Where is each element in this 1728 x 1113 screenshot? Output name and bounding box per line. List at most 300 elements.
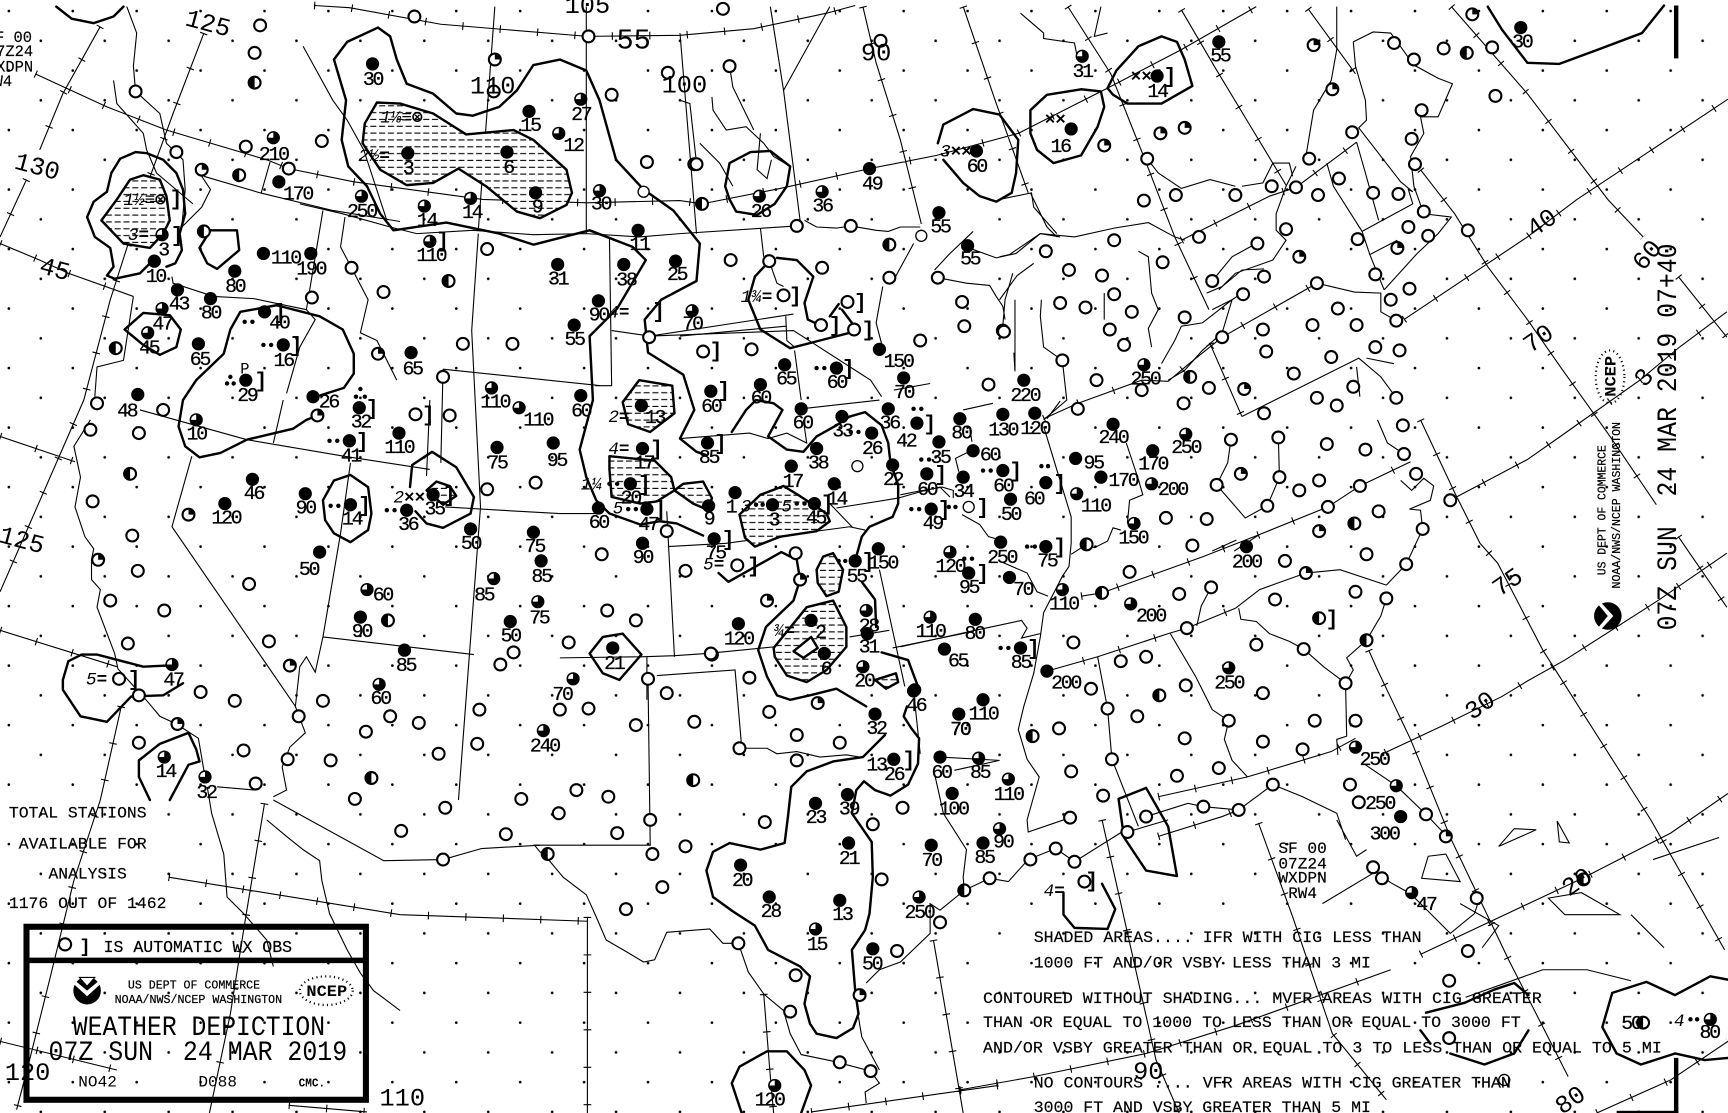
automatic observation brackets: ] xyxy=(1054,537,1066,560)
station ceiling values: 50 xyxy=(1621,1012,1642,1035)
station ceiling values: 95 xyxy=(547,449,568,472)
automatic observation brackets: ] xyxy=(1009,461,1022,484)
station ceiling values: 150 xyxy=(884,350,914,373)
station ceiling values: 75 xyxy=(525,535,546,558)
station ceiling values: 65 xyxy=(402,358,423,381)
shading legend text: THAN OR EQUAL TO 1000 TO LESS THAN OR EQUAL TO 3000 FT xyxy=(983,1014,1521,1032)
station ceiling values: 110 xyxy=(994,783,1024,806)
station ceiling values: 1 xyxy=(726,495,737,518)
station ceiling values: 30 xyxy=(591,192,612,215)
station ceiling values: 50 xyxy=(299,558,320,581)
station ceiling values: 210 xyxy=(259,143,289,166)
station ceiling values: 10 xyxy=(146,265,166,288)
visibility annotations: 3×× xyxy=(940,142,972,162)
station ceiling values: 41 xyxy=(341,445,361,468)
station ceiling values: 200 xyxy=(1051,672,1082,695)
station ceiling values: 110 xyxy=(968,703,999,726)
station ceiling values: 110 xyxy=(916,620,946,643)
map code xyxy=(1278,840,1327,903)
automatic observation brackets: ] xyxy=(710,341,722,364)
station ceiling values: 10 xyxy=(187,423,207,446)
station ceiling values: 36 xyxy=(880,412,900,435)
station ceiling values: 26 xyxy=(884,763,905,786)
station ceiling values: 13 xyxy=(866,753,887,776)
station ceiling values: 26 xyxy=(751,200,771,223)
station ceiling values: 50 xyxy=(1001,503,1022,526)
station ceiling values: 85 xyxy=(974,846,995,869)
station ceiling values: 85 xyxy=(970,761,991,784)
map code: 07Z24 xyxy=(1278,855,1327,873)
automatic observation brackets: ] xyxy=(290,336,302,359)
station ceiling values: 12 xyxy=(563,134,584,157)
automatic observation brackets: ] xyxy=(862,320,874,343)
station ceiling values: 46 xyxy=(906,694,927,717)
station ceiling values: 31 xyxy=(548,267,569,290)
station ceiling values: 60 xyxy=(793,412,813,435)
station ceiling values: 95 xyxy=(1084,451,1104,474)
station ceiling values: 100 xyxy=(939,797,969,820)
station ceiling values: 75 xyxy=(529,607,550,630)
station ceiling values: 70 xyxy=(1013,578,1034,601)
station ceiling values: 22 xyxy=(883,468,904,491)
station ceiling values: 28 xyxy=(761,900,781,923)
station ceiling values: 45 xyxy=(806,506,827,529)
station ceiling values: 35 xyxy=(425,498,445,521)
station ceiling values: 25 xyxy=(667,263,688,286)
station ceiling values: 6 xyxy=(503,156,514,179)
visibility annotations: 1¾= xyxy=(741,288,772,308)
station ceiling values: 250 xyxy=(1360,748,1390,771)
automatic observation brackets: ] xyxy=(722,529,734,552)
station ceiling values: 85 xyxy=(474,584,495,607)
present weather P marker: P xyxy=(240,361,250,379)
visibility annotations: 2= xyxy=(608,408,629,428)
automatic observation brackets: ] xyxy=(422,405,435,428)
station ceiling values: 200 xyxy=(1136,605,1166,628)
station ceiling values: 31 xyxy=(1072,60,1093,83)
automatic observation brackets: ] xyxy=(854,293,867,316)
station ceiling values: 70 xyxy=(922,849,942,872)
station ceiling values: 38 xyxy=(808,451,829,474)
grid labels: 30 xyxy=(1460,686,1501,727)
station ceiling values: 30 xyxy=(1512,30,1533,53)
title box: WEATHER DEPICTION xyxy=(73,1013,325,1044)
station ceiling values: 200 xyxy=(1232,551,1262,574)
station ceiling values: 65 xyxy=(776,368,797,391)
automatic observation brackets: ] xyxy=(170,189,182,212)
station ceiling values: 43 xyxy=(169,293,190,316)
station ceiling values: 60 xyxy=(917,478,938,501)
station ceiling values: 17 xyxy=(634,451,655,474)
automatic observation brackets: ] xyxy=(924,414,936,437)
station ceiling values: 75 xyxy=(1037,549,1058,572)
station ceiling values: 250 xyxy=(1171,436,1202,459)
station ceiling values: 60 xyxy=(980,444,1001,467)
automatic observation brackets: ] xyxy=(976,498,989,521)
station ceiling values: 13 xyxy=(832,903,853,926)
title box: ] xyxy=(79,936,91,958)
visibility annotations: 1⅛≡⊗ xyxy=(380,108,423,128)
automatic observation brackets: ] xyxy=(358,495,371,518)
station ceiling values: 80 xyxy=(965,622,985,645)
grid labels: 100 xyxy=(662,72,707,101)
grid labels: 45 xyxy=(36,252,73,288)
station ceiling values: 190 xyxy=(296,257,327,280)
icon: rotated NCEP logo xyxy=(1596,350,1624,403)
station ceiling values: 3 xyxy=(403,157,414,180)
grid labels: 110 xyxy=(379,1084,425,1113)
station ceiling values: 31 xyxy=(859,635,879,658)
automatic observation brackets: ] xyxy=(717,381,730,404)
station ceiling values: 60 xyxy=(931,761,952,784)
station ceiling values: 60 xyxy=(371,687,391,710)
station ceiling values: 16 xyxy=(274,349,294,372)
station ceiling values: 220 xyxy=(1010,384,1041,407)
station ceiling values: 250 xyxy=(1214,672,1245,695)
icon: rotated NOAA logo xyxy=(1594,602,1622,630)
automatic observation brackets: ] xyxy=(443,485,456,508)
station ceiling values: 11 xyxy=(630,233,650,256)
automatic observation brackets: ] xyxy=(1027,639,1040,662)
title box: 07Z SUN 24 MAR 2019 xyxy=(49,1038,347,1069)
visibility annotations: 5 xyxy=(781,497,792,517)
station ceiling values: 47 xyxy=(638,513,659,536)
automatic observation brackets: ] xyxy=(654,500,666,523)
station ceiling values: 85 xyxy=(531,565,552,588)
automatic observation brackets: ] xyxy=(829,316,841,339)
grid labels: 70 xyxy=(1518,319,1560,360)
visibility annotations: 5= xyxy=(703,556,724,576)
station ceiling values: 55 xyxy=(847,565,867,588)
station ceiling values: 240 xyxy=(530,735,560,758)
station ceiling values: 14 xyxy=(342,508,363,531)
automatic observation brackets: ] xyxy=(1326,609,1338,632)
automatic observation brackets: ] xyxy=(714,434,727,457)
station ceiling values: 130 xyxy=(988,418,1019,441)
station ceiling values: 110 xyxy=(480,391,511,414)
station ceiling values: 70 xyxy=(950,718,971,741)
station ceiling values: 60 xyxy=(827,371,847,394)
station ceiling values: 50 xyxy=(862,953,883,976)
station ceiling values: 80 xyxy=(951,422,972,445)
station ceiling values: 47 xyxy=(1416,893,1437,916)
icon: NCEP logo: NCEP xyxy=(306,983,347,1001)
station ceiling values: 250 xyxy=(987,546,1018,569)
automatic observation brackets: ] xyxy=(862,552,874,575)
weather symbol dots xyxy=(225,320,1699,1022)
automatic observation brackets: ] xyxy=(638,474,651,497)
automatic observation brackets: ] xyxy=(436,231,449,254)
total stations note: ANALYSIS xyxy=(49,865,127,883)
station ceiling values: 32 xyxy=(866,717,887,740)
station ceiling values: 34 xyxy=(953,480,974,503)
station ceiling values: 110 xyxy=(523,408,554,431)
corner registration marks xyxy=(1617,6,1678,1113)
shading legend text: SHADED AREAS.... IFR WITH CIG LESS THAN xyxy=(1034,929,1422,947)
station ceiling values: 75 xyxy=(706,542,726,565)
station ceiling values: 2 xyxy=(815,621,826,644)
grid labels: 90 xyxy=(861,40,891,69)
automatic observation brackets: ] xyxy=(903,750,915,773)
automatic observation brackets: ] xyxy=(821,494,834,517)
grid labels: 120 xyxy=(5,1059,50,1088)
station ceiling values: 15 xyxy=(807,933,828,956)
total stations note: TOTAL STATIONS xyxy=(9,805,147,823)
visibility annotations: 4 xyxy=(1674,1012,1685,1032)
shading legend text: CONTOURED WITHOUT SHADING... MVFR AREAS WITH CIG GREATER xyxy=(983,990,1542,1008)
rotated agency credit: US DEPT OF COMMERCE xyxy=(1596,445,1610,575)
missing observation markers xyxy=(638,186,1510,1085)
station ceiling values: 21 xyxy=(839,847,860,870)
station ceiling values: 47 xyxy=(152,312,173,335)
station ceiling values: 90 xyxy=(296,497,316,520)
automatic observation brackets: ] xyxy=(171,225,183,248)
shading legend text: 1000 FT AND/OR VSBY LESS THAN 3 MI xyxy=(1034,955,1371,973)
station ceiling values: 250 xyxy=(1130,368,1161,391)
shading legend text: AND/OR VSBY GREATER THAN OR EQUAL TO 3 TO LESS THAN OR EQUAL TO 5 MI xyxy=(983,1039,1662,1057)
station ceiling values: 150 xyxy=(868,552,899,575)
grid labels: 20 xyxy=(1557,862,1598,903)
station ceiling values: 39 xyxy=(839,797,860,820)
top-left map code xyxy=(0,29,33,91)
station ceiling values: 23 xyxy=(806,806,827,829)
station ceiling values: 20 xyxy=(621,487,641,510)
automatic observation brackets: ] xyxy=(789,286,802,309)
rotated date title: 07Z SUN 24 MAR 2019 07+40 xyxy=(1654,244,1685,630)
station ceiling values: 27 xyxy=(571,103,592,126)
station ceiling values: 80 xyxy=(1700,1021,1720,1044)
station ceiling values: 240 xyxy=(1099,426,1129,449)
map code: SF 00 xyxy=(1278,840,1327,858)
station ceiling values: 60 xyxy=(751,386,771,409)
station ceiling values: 14 xyxy=(156,760,176,783)
total stations note: 1176 OUT OF 1462 xyxy=(9,895,166,913)
station ceiling values: 26 xyxy=(862,437,883,460)
station ceiling values: 75 xyxy=(487,451,508,474)
total stations note xyxy=(9,805,166,913)
station ceiling values: 250 xyxy=(1365,792,1396,815)
station ceiling values: 120 xyxy=(1020,417,1051,440)
automatic observation brackets: ] xyxy=(935,464,947,487)
visibility annotations: 5 xyxy=(613,500,624,520)
station ceiling values: 60 xyxy=(993,474,1014,497)
visibility annotations: 3 xyxy=(741,497,751,517)
automatic observation brackets xyxy=(128,67,1338,894)
visibility annotations: ¾= xyxy=(774,622,795,642)
automatic observation brackets: ] xyxy=(650,439,663,462)
automatic observation brackets: ] xyxy=(273,302,286,325)
station ceiling values: 36 xyxy=(398,513,419,536)
station ceiling values: 60 xyxy=(373,584,393,607)
station ceiling values: 50 xyxy=(461,532,482,555)
station ceiling values: 55 xyxy=(930,216,951,239)
station ceiling values: 90 xyxy=(352,620,372,643)
automatic observation brackets: ] xyxy=(747,556,760,579)
station ceiling values: 95 xyxy=(959,576,980,599)
station ceiling values: 110 xyxy=(271,246,301,269)
station ceiling values: 70 xyxy=(682,312,703,335)
station ceiling values: 35 xyxy=(930,446,951,469)
station ceiling values: 110 xyxy=(416,244,447,267)
grid labels: 60 xyxy=(1627,235,1669,277)
station ceiling values: 170 xyxy=(1138,452,1169,475)
station ceiling values: 200 xyxy=(1158,478,1188,501)
title box: D088 xyxy=(198,1074,237,1092)
grid labels: 75 xyxy=(1487,563,1529,604)
automatic observation brackets: ] xyxy=(356,431,369,454)
automatic observation brackets: ] xyxy=(1054,473,1066,496)
visibility annotations: 4= xyxy=(608,440,629,460)
automatic observation brackets: ] xyxy=(255,371,267,394)
station ceiling values: 47 xyxy=(163,668,184,691)
station ceiling values: 70 xyxy=(552,683,573,706)
automatic observation brackets: ] xyxy=(976,564,989,587)
total stations note: AVAILABLE FOR xyxy=(19,836,147,854)
station ceiling values: 49 xyxy=(862,173,883,196)
title box: CMC. xyxy=(299,1077,325,1091)
station ceiling values: 3 xyxy=(158,239,169,262)
station ceiling values: 110 xyxy=(1081,494,1111,517)
automatic observation brackets: ] xyxy=(366,398,378,421)
icon: rotated NCEP logo: NCEP xyxy=(1603,356,1621,397)
station ceiling values: 32 xyxy=(196,781,217,804)
automatic stations (open circles) xyxy=(84,3,1501,1077)
station ceiling values: 38 xyxy=(616,268,637,291)
station ceiling values: 120 xyxy=(724,628,754,651)
shading legend text xyxy=(983,929,1662,1113)
automatic observation brackets: ] xyxy=(652,301,665,324)
station ceiling values: 120 xyxy=(755,1088,785,1111)
grid labels: 90 xyxy=(1133,1058,1164,1087)
visibility annotations: 1½≡⊗ xyxy=(123,191,166,211)
map code: RW4 xyxy=(1288,885,1317,903)
station ceiling values: 16 xyxy=(1050,135,1071,158)
station ceiling values: 80 xyxy=(225,275,246,298)
station ceiling values: 6 xyxy=(821,657,832,680)
rotated agency credit xyxy=(1596,422,1624,588)
rotated agency credit: NOAA/NWS/NCEP WASHINGTON xyxy=(1610,422,1624,588)
station ceiling values: 120 xyxy=(935,555,966,578)
grid labels: 110 xyxy=(470,73,515,102)
automatic observation brackets: ] xyxy=(128,669,140,692)
visibility annotations: 4= xyxy=(608,303,629,323)
automatic observation brackets: ] xyxy=(938,500,950,523)
title box: US DEPT OF COMMERCE xyxy=(128,978,260,992)
station ceiling values: 20 xyxy=(854,670,875,693)
station ceiling values: 15 xyxy=(520,114,541,137)
station ceiling values: 14 xyxy=(827,488,847,511)
station ceiling values: 26 xyxy=(319,391,339,414)
station ceiling values: 55 xyxy=(564,328,585,351)
station ceiling values: 29 xyxy=(237,384,258,407)
icon: NCEP logo xyxy=(300,976,353,1005)
station ceiling values: 170 xyxy=(1108,469,1139,492)
icon: NOAA logo xyxy=(73,977,101,1004)
station ceiling values: 60 xyxy=(589,511,609,534)
station ceiling values: 55 xyxy=(1210,45,1231,68)
station ceiling values: 90 xyxy=(993,830,1014,853)
station ceiling values: 120 xyxy=(211,506,242,529)
station ceiling values: 30 xyxy=(363,68,384,91)
station ceiling values: 150 xyxy=(1118,526,1149,549)
station ceiling values: 85 xyxy=(699,446,720,469)
station ceiling values: 70 xyxy=(894,381,915,404)
station ceiling values: 13 xyxy=(645,406,666,429)
station ceiling values: 300 xyxy=(1370,823,1400,846)
station ceiling values: 80 xyxy=(201,301,222,324)
station ceiling values: 110 xyxy=(384,436,415,459)
grid labels: 3 xyxy=(1629,363,1661,393)
station ceiling values: 60 xyxy=(967,155,987,178)
station ceiling values: 36 xyxy=(812,195,833,218)
station ceiling values: 3 xyxy=(769,509,780,532)
station ceiling values: 85 xyxy=(396,654,417,677)
visibility annotations: 1¼ xyxy=(581,475,602,495)
station ceiling values: 110 xyxy=(1049,592,1079,615)
station ceiling values: 45 xyxy=(139,337,160,360)
station ceiling values: 14 xyxy=(417,209,438,232)
visibility annotations: 3= xyxy=(128,226,149,246)
station ceiling values: 60 xyxy=(1024,488,1045,511)
visibility annotations: 4= xyxy=(1044,882,1065,902)
station ceiling values: 17 xyxy=(783,470,803,493)
title box: IS AUTOMATIC WX OBS xyxy=(104,938,292,957)
IFR shaded areas xyxy=(101,102,898,689)
station ceiling values: 90 xyxy=(633,546,654,569)
station ceiling values: 85 xyxy=(1011,651,1031,674)
station ceiling values: 32 xyxy=(351,411,371,434)
title box: NO42 xyxy=(78,1074,117,1092)
station ceiling values: 21 xyxy=(604,652,625,675)
station ceiling values: 60 xyxy=(701,395,722,418)
station ceiling values: 50 xyxy=(501,624,521,647)
grid labels: 125 xyxy=(182,5,234,44)
shading legend text: NO CONTOURS .... VFR AREAS WITH CIG GREATER THAN xyxy=(1034,1075,1511,1093)
automatic observation brackets: ] xyxy=(842,359,855,382)
grid labels: 130 xyxy=(11,148,63,188)
station ceiling values: 14 xyxy=(462,201,483,224)
visibility annotations: ×× xyxy=(1131,68,1152,88)
station ceiling values: 65 xyxy=(190,348,211,371)
station ceiling values: 20 xyxy=(732,869,753,892)
station ceiling values: 250 xyxy=(347,200,377,223)
station ceiling values: 28 xyxy=(859,614,879,637)
grid labels: 40 xyxy=(1522,203,1563,244)
title box xyxy=(26,927,366,1100)
title box: NOAA/NWS/NCEP WASHINGTON xyxy=(115,993,282,1007)
overcast stations (filled circles) xyxy=(131,21,1527,955)
station ceiling values: 250 xyxy=(905,901,935,924)
station ceiling values: 55 xyxy=(960,247,981,270)
station ceiling values: 14 xyxy=(1147,80,1168,103)
station ceiling values: 90 xyxy=(589,304,609,327)
station ceiling values: 48 xyxy=(117,400,138,423)
grid labels: 55 xyxy=(616,24,651,57)
station ceiling values: 70 xyxy=(950,718,971,741)
visibility annotations: 2×× xyxy=(393,489,425,509)
station ceiling values: 46 xyxy=(244,482,265,505)
station ceiling values: 42 xyxy=(896,429,917,452)
station ceiling values: 60 xyxy=(571,400,592,423)
station ceiling values: 170 xyxy=(283,182,313,205)
visibility annotations: ×× xyxy=(1045,111,1066,131)
automatic observation brackets: ] xyxy=(1164,67,1176,90)
visibility annotations: 5= xyxy=(86,670,107,690)
station ceiling values: 9 xyxy=(532,196,543,219)
map code: WXDPN xyxy=(1278,870,1327,888)
station ceiling values: 65 xyxy=(948,650,969,673)
station ceiling values: 9 xyxy=(704,508,715,531)
